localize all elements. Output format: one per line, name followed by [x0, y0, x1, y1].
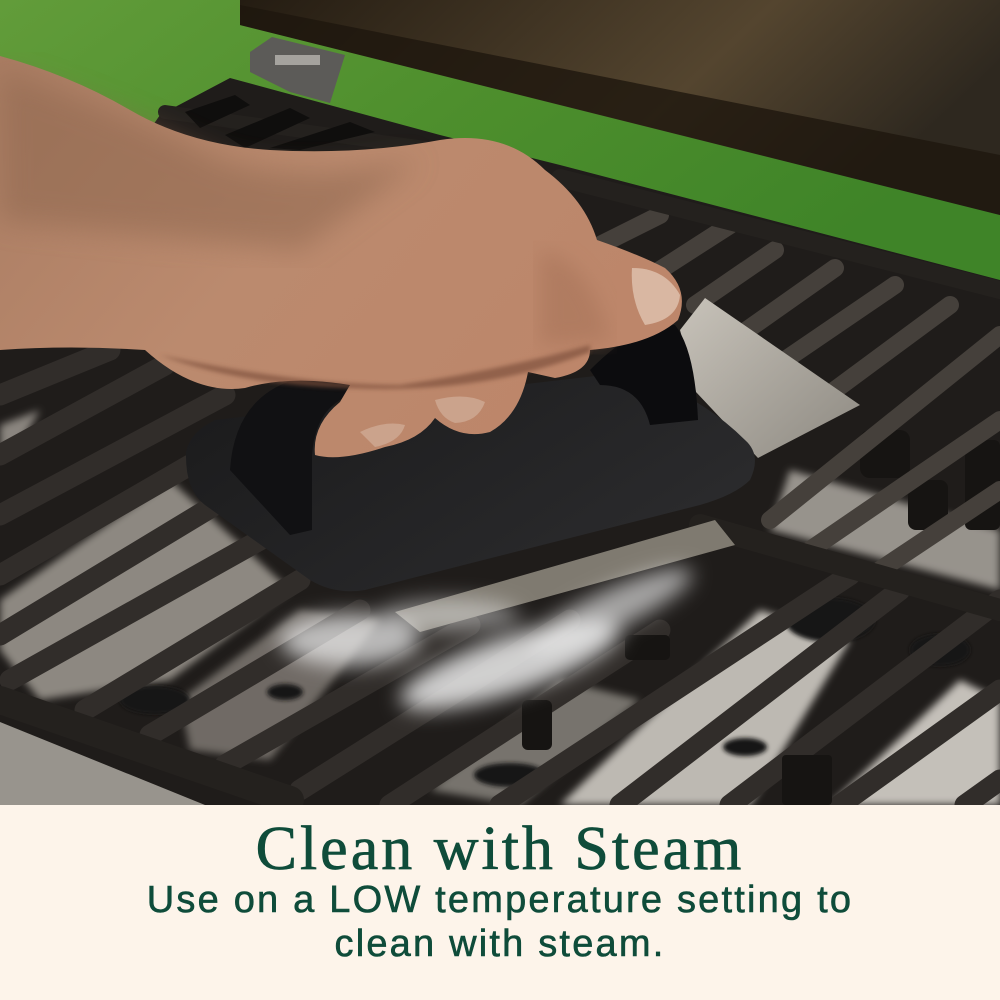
- caption panel: [0, 805, 1000, 1000]
- soot patches on floor: [120, 598, 970, 787]
- steam cloud: [280, 554, 700, 727]
- grill body: [0, 78, 1000, 805]
- steel scraper blade: [680, 298, 860, 458]
- body text: [147, 879, 853, 965]
- hand and forearm: [0, 56, 682, 457]
- grass lawn: [0, 0, 1000, 300]
- front ledge of grill: [0, 722, 205, 805]
- support posts under grates: [522, 430, 1000, 805]
- back grate section behind hand: [185, 95, 375, 150]
- body text: clean with steam.: [334, 923, 665, 965]
- body text: Use on a LOW temperature setting to: [147, 879, 853, 921]
- grate bars: lower section: [0, 350, 1000, 805]
- grill floor: ash patches: [0, 410, 1000, 805]
- grate bars: right section: [600, 215, 1000, 570]
- heading: Clean with Steam: [256, 815, 744, 883]
- scraper body and handle: [186, 325, 755, 591]
- mesh pad under scraper: [395, 520, 735, 632]
- grill lid: [240, 0, 1000, 215]
- lid hinge: [250, 37, 345, 103]
- grate cross bars: [0, 112, 1000, 800]
